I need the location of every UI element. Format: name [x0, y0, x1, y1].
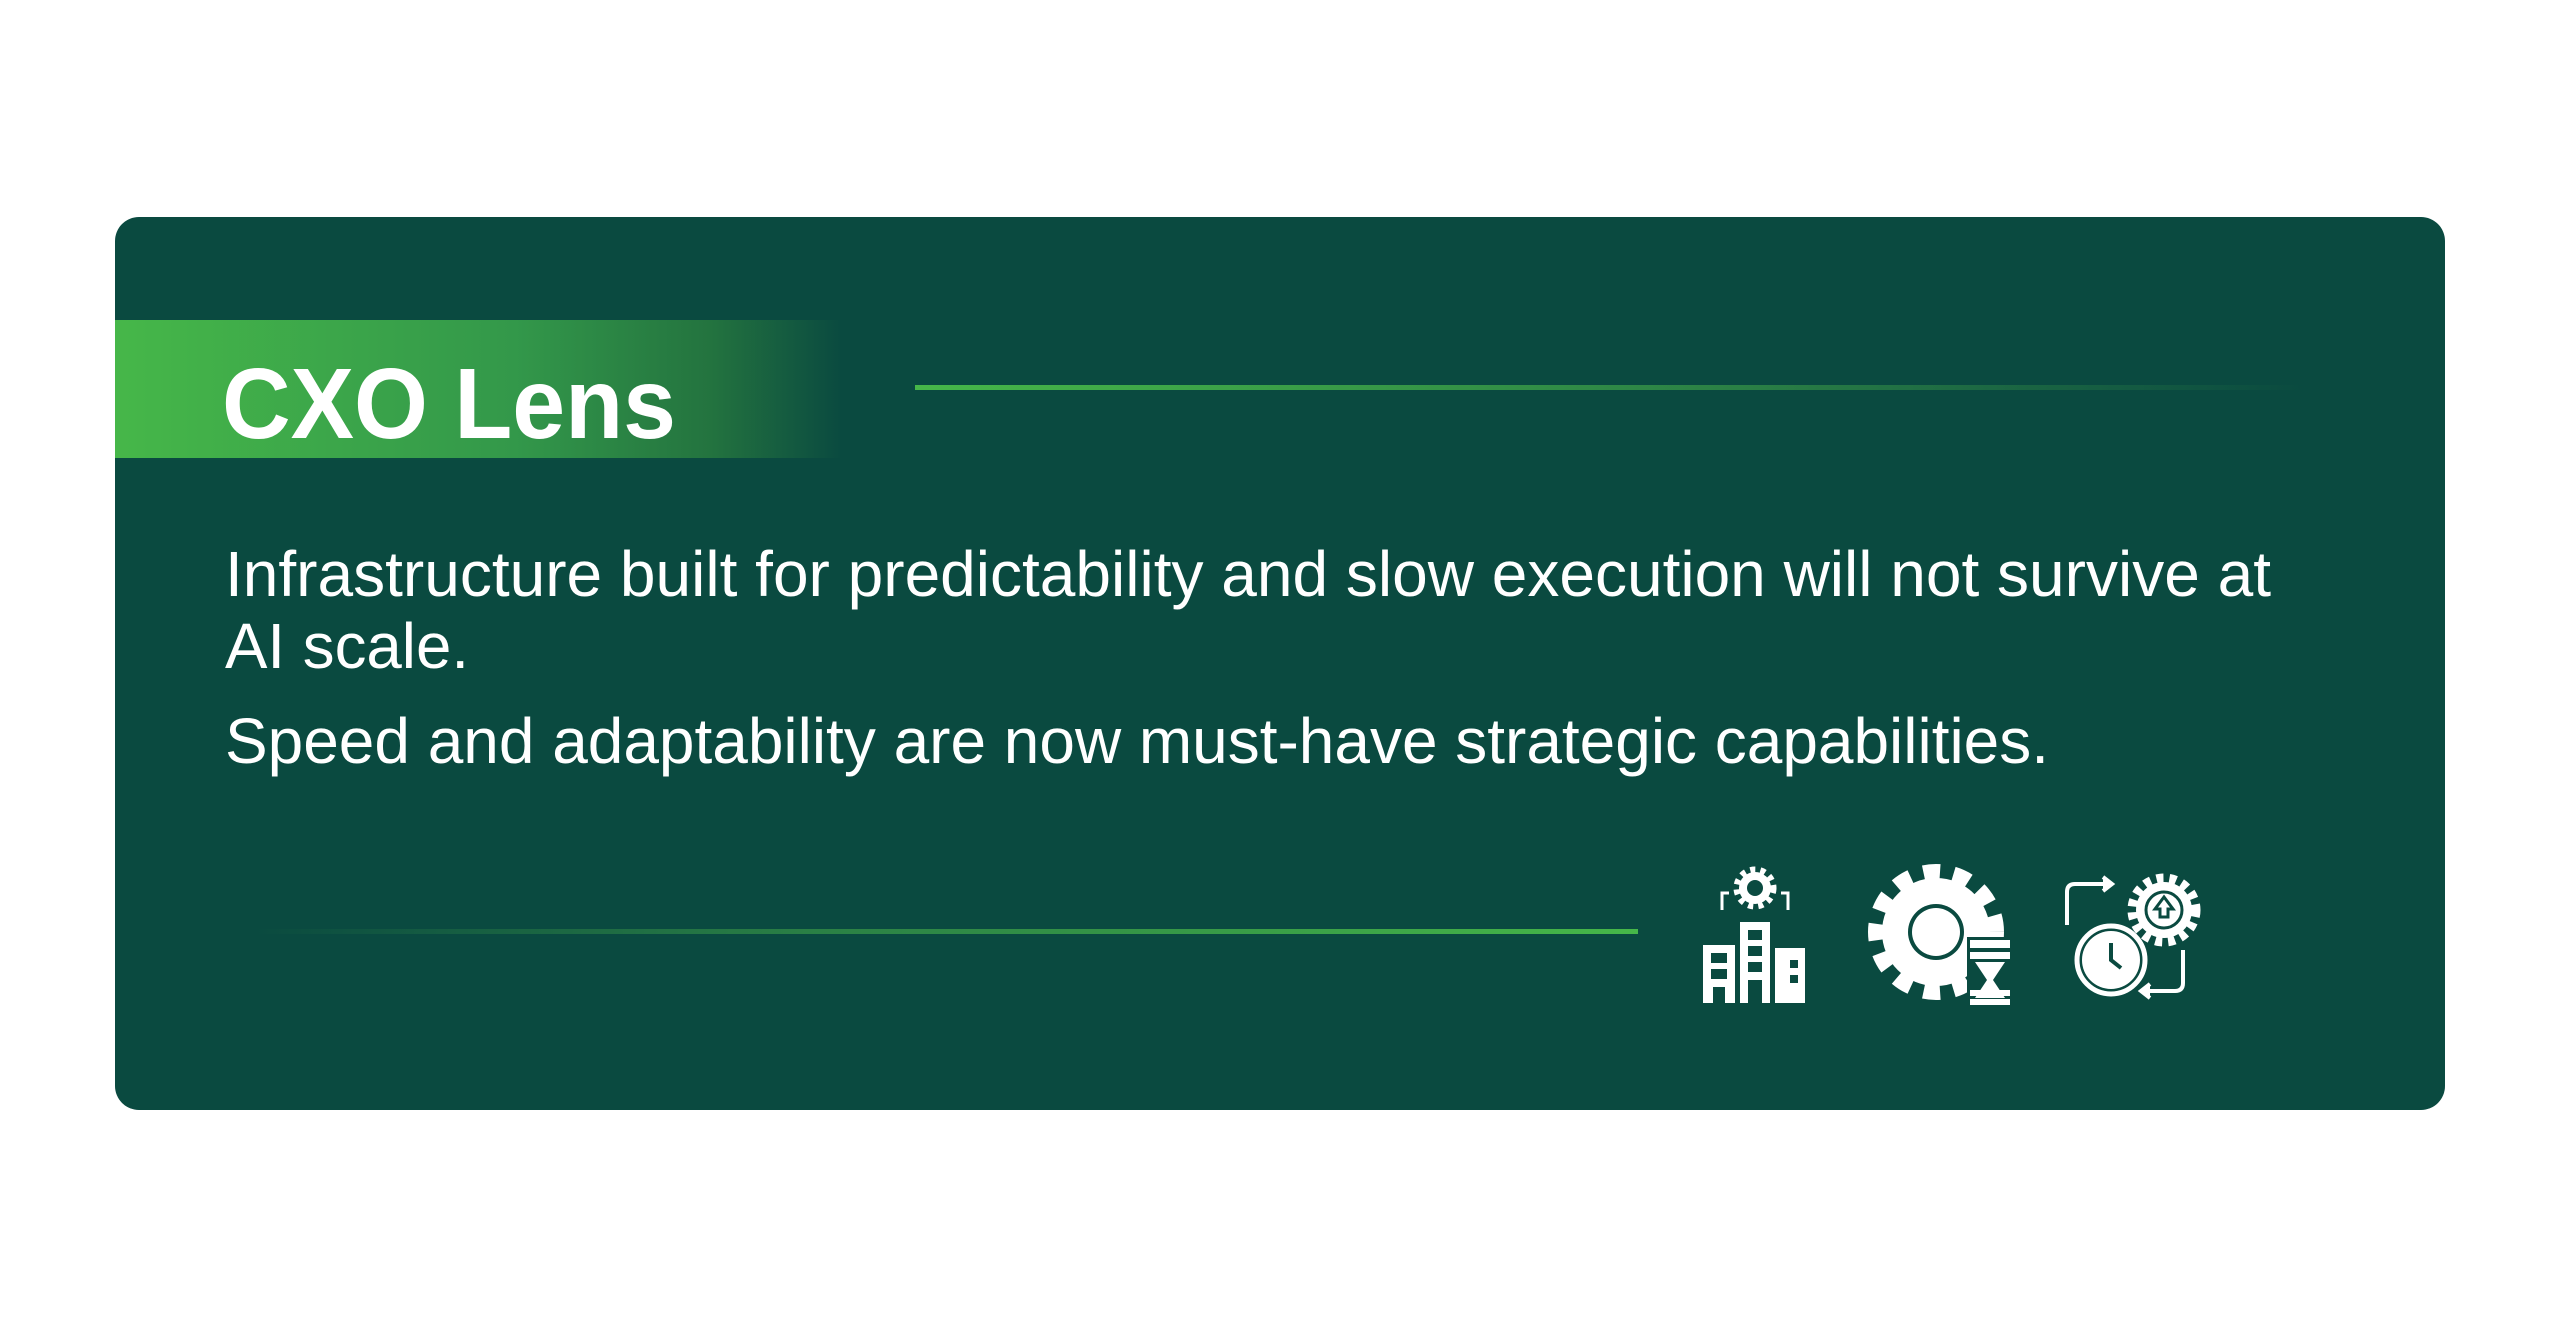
accent line bottom — [253, 929, 1638, 934]
icon: building with gear — [1703, 870, 1805, 1003]
accent line top — [915, 385, 2305, 390]
heading band — [115, 320, 842, 460]
text block: body: Infrastructure built for predictability and slow execution will not survive at — [225, 538, 2271, 610]
text block: body: Speed and adaptability are now must-have strategic capabilities. — [225, 705, 2049, 777]
text block: body: AI scale. — [225, 610, 469, 682]
text block: body — [225, 538, 2271, 777]
icon: gear with hourglass — [1878, 874, 2012, 1007]
icon: clock with gear and cycle arrows — [2067, 877, 2196, 998]
title: CXO Lens — [222, 348, 676, 460]
